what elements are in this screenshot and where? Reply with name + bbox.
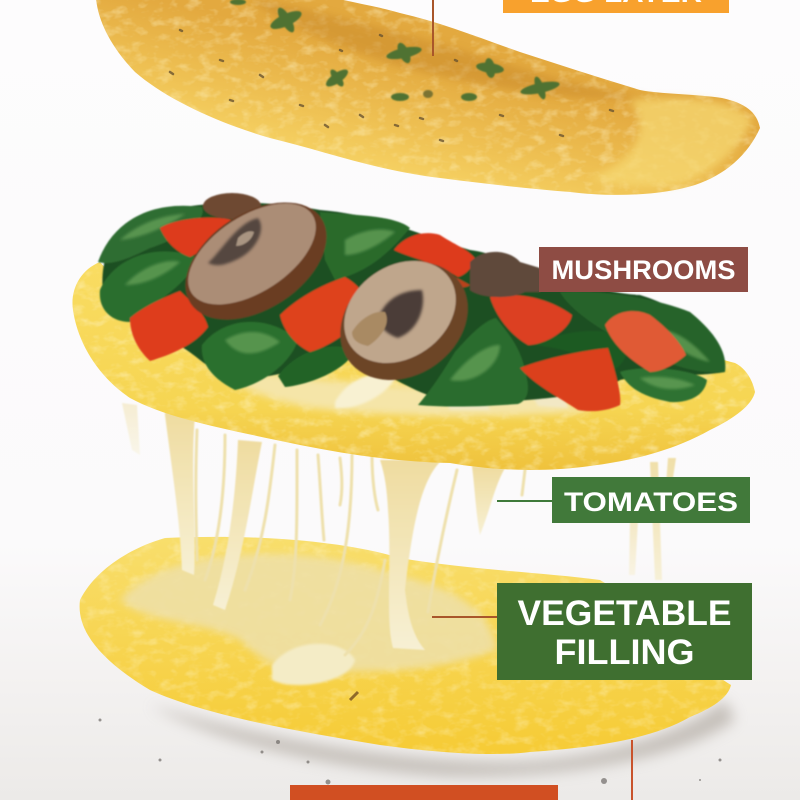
spinach bbox=[98, 206, 725, 407]
label: bottom layer bbox=[290, 785, 558, 800]
dark vegetable base bbox=[102, 203, 725, 403]
tomatoes bbox=[130, 218, 686, 411]
label: tomatoes: TOMATOES bbox=[564, 487, 738, 517]
middle omelet layer bbox=[72, 262, 755, 470]
label: mushrooms: MUSHROOMS bbox=[552, 255, 736, 285]
cheesy filling under vegetables bbox=[200, 355, 590, 416]
leader line: bottom layer bbox=[631, 740, 633, 800]
surface pepper specks bbox=[98, 718, 722, 784]
leader line: tomatoes bbox=[497, 500, 552, 502]
label: vegetable filling: VEGETABLE bbox=[518, 594, 732, 633]
vegetable filling bbox=[98, 178, 725, 411]
bottom omelet layer bbox=[80, 537, 735, 776]
large mushroom slice bbox=[164, 178, 348, 344]
surface shadow bbox=[150, 700, 735, 776]
thin cheese threads bbox=[196, 430, 525, 655]
label: egg layer bbox=[503, 0, 729, 13]
browned top bbox=[250, 0, 650, 99]
label: tomatoes bbox=[552, 477, 750, 523]
top omelet layer bbox=[96, 0, 760, 195]
label: mushrooms bbox=[539, 247, 748, 292]
label: vegetable filling: FILLING bbox=[554, 633, 694, 672]
leader line: egg layer top bbox=[432, 0, 434, 56]
melted cheese pool bbox=[120, 554, 497, 676]
pepper specks bbox=[170, 30, 613, 141]
herbs bbox=[230, 0, 561, 101]
omelet fold edge bbox=[590, 98, 752, 187]
cheese strands bbox=[122, 403, 676, 650]
mushroom slice, center bbox=[317, 238, 491, 404]
small mushroom behind bbox=[203, 193, 261, 219]
spinach highlights bbox=[120, 214, 710, 389]
label: vegetable filling bbox=[497, 583, 752, 680]
leader line: vegetable filling bbox=[432, 616, 497, 618]
